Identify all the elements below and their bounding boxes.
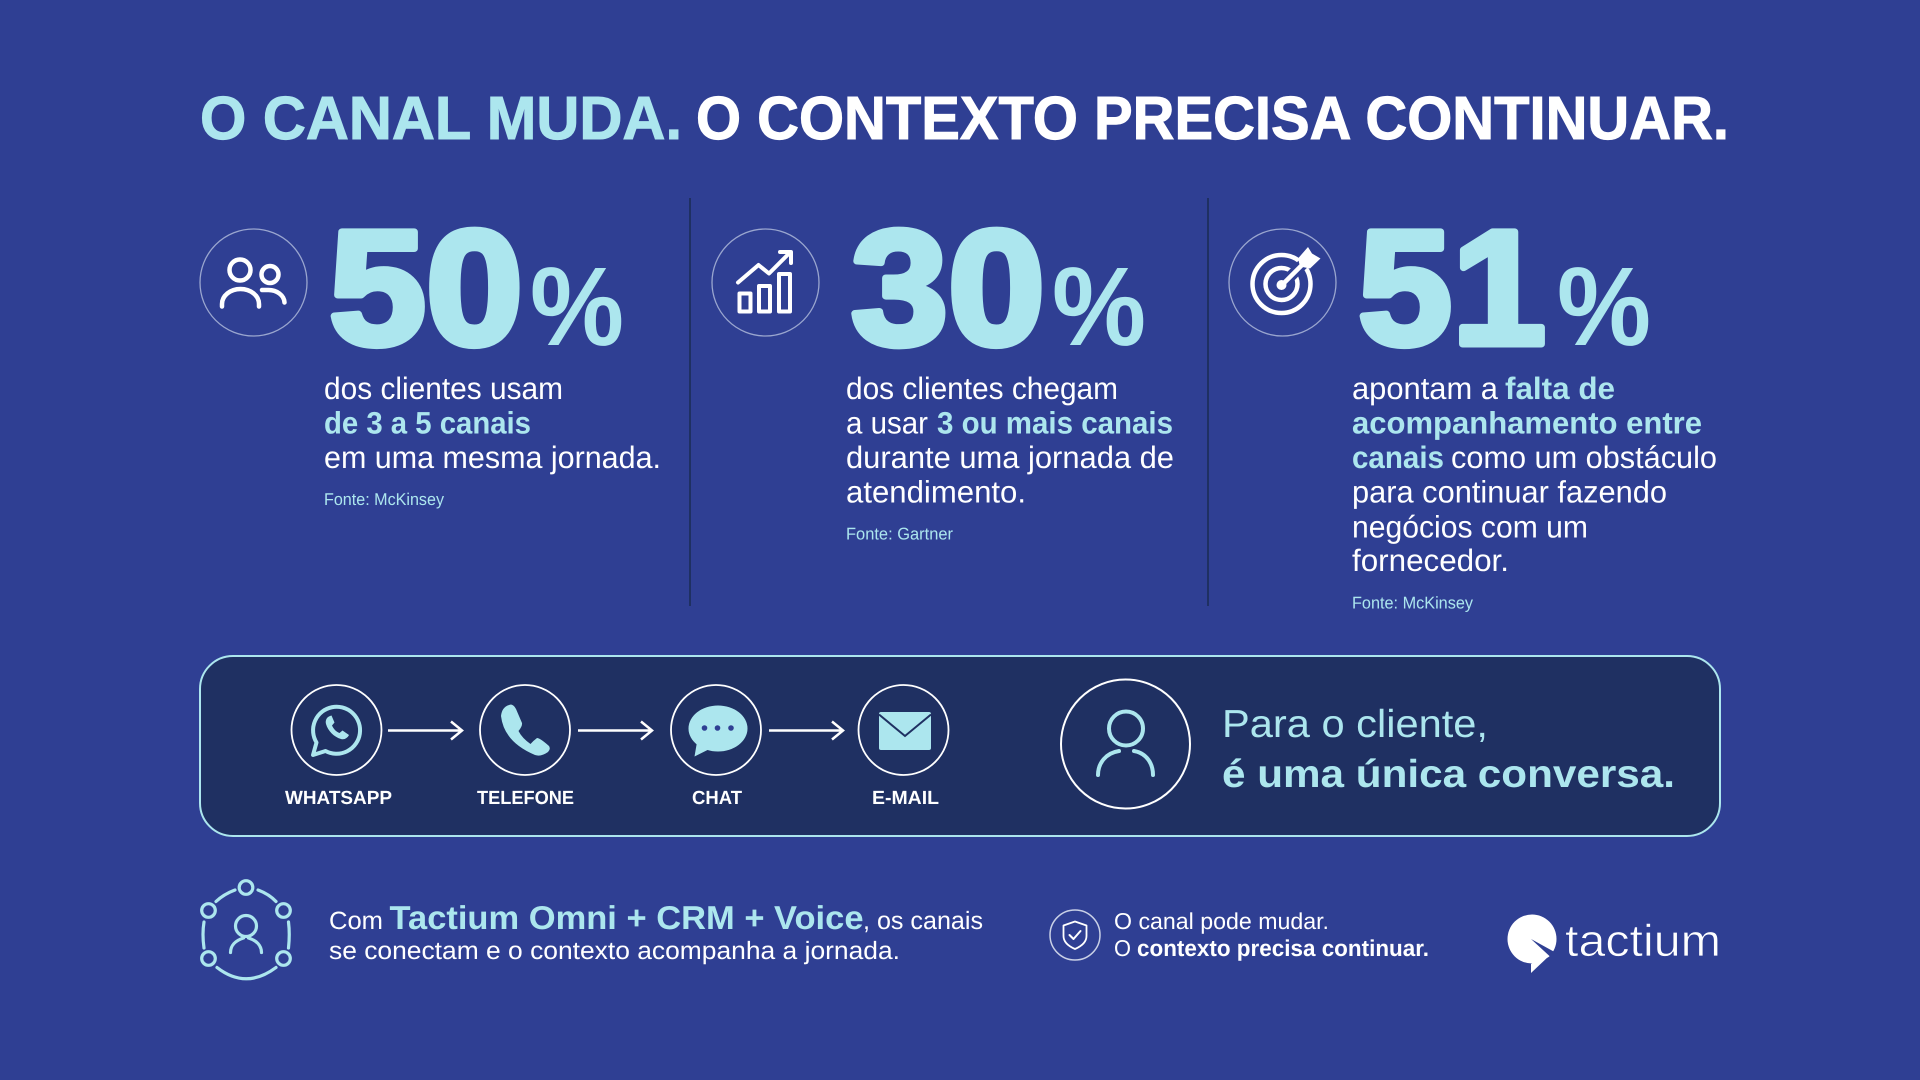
description: a usar: [846, 406, 928, 440]
text: Com: [329, 907, 383, 935]
big number 50%: 50: [329, 196, 523, 379]
logo: tactium: tactium: [1565, 915, 1721, 966]
icon: chat bubble: [688, 706, 748, 756]
big number 51%: %: [1557, 244, 1651, 369]
channel: Chat: [671, 685, 761, 809]
icon: customer: [1061, 680, 1190, 808]
big number 30%: [851, 196, 1146, 379]
description: acompanhamento entre: [1352, 406, 1702, 440]
channel: Telefone: [477, 685, 574, 809]
arrow: [578, 722, 652, 740]
description: falta de: [1505, 371, 1615, 406]
big number 51%: 51: [1358, 196, 1546, 379]
channel: WhatsApp: WHATSAPP: [285, 788, 392, 809]
icon: envelope: [879, 712, 931, 750]
channel: WhatsApp: [285, 685, 392, 809]
message: é uma única conversa.: [1222, 753, 1675, 796]
text: , os canais: [863, 907, 983, 935]
message: [1222, 703, 1675, 796]
big number 50%: [329, 196, 624, 379]
channel: Telefone: TELEFONE: [477, 788, 574, 809]
icon: target with arrow: [1229, 229, 1336, 336]
description: atendimento.: [846, 474, 1026, 510]
footer: product statement: [202, 881, 983, 979]
source: Fonte: McKinsey: [1352, 594, 1473, 612]
description: em uma mesma jornada.: [324, 440, 661, 475]
description: dos clientes chegam: [846, 371, 1118, 406]
logo: tactium: [1508, 914, 1721, 975]
icon: connected network: [202, 881, 290, 979]
icon: phone: [501, 704, 550, 756]
text: [1114, 908, 1429, 961]
text: Tactium Omni + CRM + Voice: [390, 899, 864, 936]
panel: channels banner: [200, 656, 1720, 836]
big number 51%: [1358, 196, 1651, 379]
description: dos clientes usam: [324, 371, 563, 406]
description: como um obstáculo: [1451, 440, 1717, 475]
description: [846, 371, 1174, 510]
text: se conectam e o contexto acompanha a jornada.: [329, 937, 900, 965]
arrow: [769, 722, 843, 740]
icon: shield check: [1050, 910, 1100, 960]
description: apontam a: [1352, 371, 1499, 406]
footer: closing statement: [1050, 908, 1429, 961]
source: Fonte: McKinsey: [324, 490, 444, 509]
title: [200, 84, 1729, 152]
message: Para o cliente,: [1222, 703, 1488, 746]
panel: stat 30%: [712, 196, 1174, 544]
description: para continuar fazendo: [1352, 474, 1667, 510]
title: O CANAL MUDA.: [200, 84, 682, 152]
source: Fonte: Gartner: [846, 524, 953, 544]
title: O CONTEXTO PRECISA CONTINUAR.: [696, 84, 1729, 152]
channel: Chat: CHAT: [692, 788, 742, 809]
description: de 3 a 5 canais: [324, 406, 531, 440]
arrow: [388, 722, 462, 740]
description: fornecedor.: [1352, 543, 1509, 578]
panel: stat 51%: [1229, 196, 1717, 612]
big number 30%: %: [1052, 244, 1146, 369]
text: O: [1114, 935, 1131, 961]
text: O canal pode mudar.: [1114, 908, 1329, 934]
panel: stat 50%: [200, 196, 661, 509]
description: [324, 371, 661, 475]
channel: E-mail: E-MAIL: [872, 788, 939, 809]
description: 3 ou mais canais: [937, 406, 1173, 440]
text: contexto precisa continuar.: [1137, 935, 1429, 961]
description: negócios com um: [1352, 510, 1588, 544]
description: durante uma jornada de: [846, 440, 1174, 475]
big number 30%: 30: [851, 196, 1045, 379]
description: [1352, 371, 1717, 578]
channel: E-mail: [858, 685, 948, 809]
icon: bar chart: [712, 229, 819, 336]
icon: people: [200, 229, 307, 336]
text: [329, 899, 983, 965]
big number 50%: %: [530, 244, 624, 369]
icon: whatsapp: [313, 707, 360, 755]
description: canais: [1352, 440, 1444, 475]
